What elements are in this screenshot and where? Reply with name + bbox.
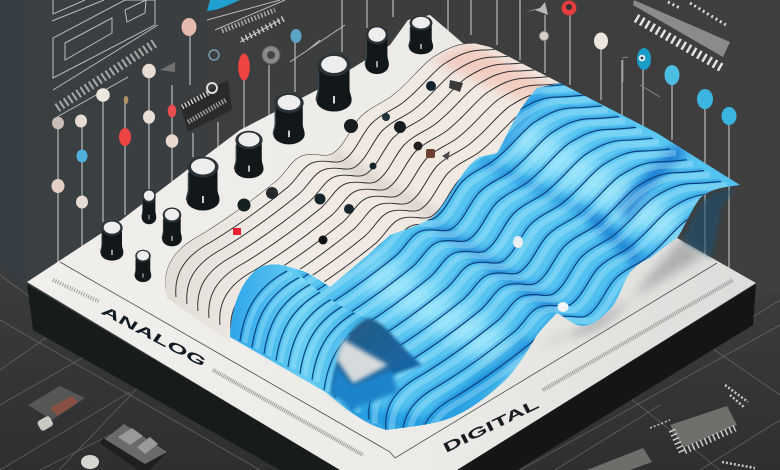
- board side faces: [27, 284, 756, 470]
- knob 8: [101, 220, 123, 261]
- black and red dots on paper: [233, 80, 463, 244]
- knob 4: [316, 54, 352, 112]
- knob 1: [186, 156, 220, 210]
- wave sheet: digital blue section: [137, 49, 740, 430]
- roll opening: [331, 318, 422, 410]
- pins left group: [52, 0, 520, 270]
- pins right group: [525, 0, 736, 268]
- knob 9: [142, 189, 156, 224]
- shadow beneath wave: [540, 240, 705, 350]
- small device: [28, 386, 85, 432]
- knob 10: [135, 250, 151, 282]
- knobs: [101, 15, 433, 282]
- board edge lines: [60, 262, 717, 458]
- label: DIGITAL: DIGITAL: [440, 396, 542, 456]
- white beads: [513, 236, 568, 312]
- pin heads right: [525, 0, 736, 125]
- scribbles: [650, 385, 755, 468]
- knob 6: [409, 15, 433, 54]
- knob 3: [273, 93, 305, 144]
- dark fold bands: [345, 90, 682, 428]
- knob 5: [365, 26, 389, 74]
- lower right components: [587, 385, 755, 470]
- dark reflection beneath crest: [682, 190, 735, 258]
- IC chip upper right: [633, 0, 730, 68]
- wave sheet: analog paper section: [165, 43, 560, 341]
- capacitor lower left: [81, 455, 99, 469]
- label: ANALOG: ANALOG: [98, 304, 209, 369]
- floor shading left: [0, 262, 280, 470]
- lower left components: [28, 386, 167, 470]
- micro text strips: [53, 280, 733, 455]
- chip bottom: [587, 448, 652, 470]
- floor grid lines: [0, 275, 780, 470]
- roll front: [230, 264, 376, 395]
- knob 7: [162, 207, 182, 246]
- schematic sketches upper left: [52, 0, 158, 117]
- chip lower right: [670, 406, 737, 452]
- knob 2: [234, 131, 264, 178]
- light bands: [370, 130, 680, 370]
- pin heads: [52, 18, 302, 208]
- chip lower left: [100, 424, 167, 470]
- floor shading right: [517, 290, 780, 470]
- chip label sketches centre: [160, 0, 345, 132]
- stripe lines: [291, 86, 727, 430]
